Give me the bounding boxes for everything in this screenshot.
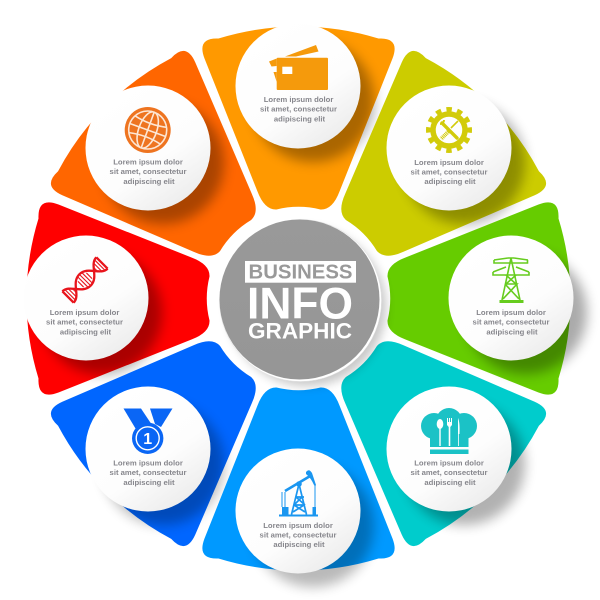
text block <box>260 521 336 549</box>
label box: business <box>245 261 356 283</box>
text block: sit amet, consectetur <box>473 318 549 327</box>
white circle <box>386 86 512 210</box>
text block: adipiscing elit <box>60 327 112 336</box>
panel: blue segment, medal <box>38 293 304 559</box>
heading: business: BUSINESS <box>248 261 352 284</box>
panel: cyan segment, chef hat <box>293 293 559 559</box>
text block: adipiscing elit <box>486 327 538 336</box>
icon: gear with tools <box>428 110 470 150</box>
text block: Lorem ipsum dolor <box>113 158 183 166</box>
white circle <box>86 86 210 210</box>
icon: credit cards <box>269 45 328 90</box>
segment shape: blue <box>38 293 304 559</box>
panel: red segment, DNA <box>24 202 210 395</box>
circle shadow <box>102 102 224 224</box>
segment shape: yellow <box>293 38 559 304</box>
icon: chef hat with cutlery <box>421 408 477 454</box>
white circle <box>386 386 512 512</box>
text block: Lorem ipsum dolor <box>113 458 183 468</box>
segment shape: sky blue <box>202 387 395 571</box>
text block: sit amet, consectetur <box>110 468 186 477</box>
text block <box>411 158 487 186</box>
icon: oil pump <box>279 470 318 516</box>
text block: sit amet, consectetur <box>260 105 337 114</box>
text block: Lorem ipsum dolor <box>263 521 333 530</box>
panel: yellow segment, gear <box>293 38 559 304</box>
segment shape: cyan <box>293 293 559 559</box>
text block: adipiscing elit <box>274 114 326 123</box>
text block: Lorem ipsum dolor <box>264 95 333 104</box>
circle shadow <box>252 40 374 162</box>
panel: green segment, pylon <box>387 202 587 395</box>
text block: adipiscing elit <box>424 177 476 186</box>
text block <box>46 308 123 336</box>
centre shadow <box>228 228 386 386</box>
text block <box>411 458 487 487</box>
white circle <box>236 24 360 148</box>
text block: Lorem ipsum dolor <box>50 308 119 317</box>
segment shape: green <box>387 202 571 395</box>
segment shape: amber <box>202 26 395 210</box>
icon: globe <box>123 106 172 154</box>
circle shadow <box>252 465 374 587</box>
circle shadow <box>465 252 587 374</box>
icon: power pylon <box>493 258 529 303</box>
segment shape: red <box>26 202 210 395</box>
text block: sit amet, consectetur <box>411 168 487 176</box>
icon: medal: 1 <box>143 431 152 448</box>
text block: sit amet, consectetur <box>411 468 487 477</box>
circle shadow <box>102 403 224 525</box>
text block <box>110 458 186 487</box>
text block: Lorem ipsum dolor <box>414 458 484 468</box>
circle shadow <box>40 252 162 374</box>
panel: amber segment, credit cards <box>202 24 395 210</box>
white circle <box>86 386 210 512</box>
text block: adipiscing elit <box>273 540 325 549</box>
circle shadow <box>403 403 525 525</box>
text block: adipiscing elit <box>123 177 175 186</box>
text block: sit amet, consectetur <box>46 318 123 327</box>
white circle <box>448 236 574 360</box>
text block: Lorem ipsum dolor <box>414 158 484 167</box>
text block <box>473 308 549 336</box>
text block: Lorem ipsum dolor <box>476 308 546 317</box>
panel: centre badge <box>220 220 386 386</box>
icon: medal <box>124 408 172 454</box>
panel: sky blue segment, oil pump <box>202 387 395 587</box>
heading: info: INFO <box>247 279 353 328</box>
white circle <box>236 448 360 574</box>
panel: orange segment, globe <box>50 50 256 256</box>
white circle <box>24 236 148 360</box>
text block <box>260 95 337 123</box>
segment shape: dark orange <box>38 38 304 304</box>
heading: graphic: GRAPHIC <box>248 318 352 343</box>
text block: sit amet, consectetur <box>110 167 186 176</box>
text block <box>110 158 186 186</box>
icon: DNA helix <box>62 257 108 303</box>
text block: sit amet, consectetur <box>260 530 336 540</box>
centre disc <box>220 220 380 380</box>
centre ring <box>220 220 382 382</box>
circle shadow <box>403 102 525 224</box>
text block: adipiscing elit <box>424 478 476 487</box>
text block: adipiscing elit <box>123 478 175 487</box>
